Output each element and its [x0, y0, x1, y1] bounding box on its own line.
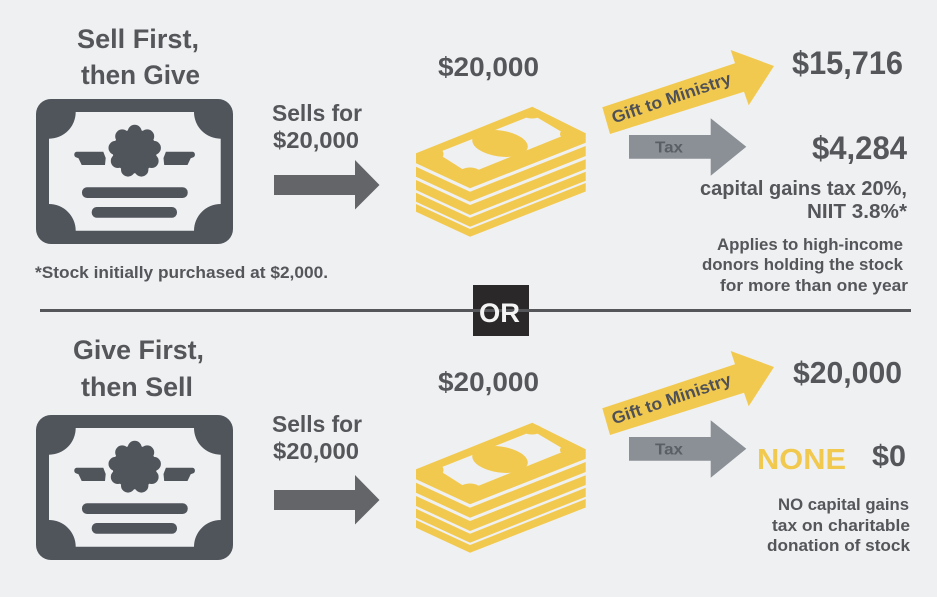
label: sells for	[272, 411, 362, 464]
text: applies to: donors holding the stock	[702, 256, 904, 274]
text: applies to: for more than one year	[720, 277, 909, 295]
amount: sale proceeds: $20,000	[438, 367, 539, 397]
label: sells for	[272, 100, 362, 153]
amount: tax: $4,284	[812, 130, 907, 166]
text: tax rates	[700, 178, 907, 223]
label: none: NONE	[757, 444, 846, 476]
icon: money stack	[416, 423, 586, 553]
heading: sell first	[77, 24, 200, 90]
heading: sell first: Sell First,	[77, 24, 199, 54]
arrow: gift to ministry: Gift to Ministry	[609, 370, 734, 428]
panel: give first, then sell	[36, 335, 911, 560]
heading: give first: Give First,	[73, 335, 204, 365]
divider line	[40, 309, 911, 312]
arrow: sale	[274, 475, 380, 524]
text: applies to	[702, 236, 909, 295]
text: tax rates: NIIT 3.8%*	[807, 201, 907, 223]
arrow: tax	[629, 118, 746, 176]
badge: or: OR	[479, 298, 520, 328]
amount: gift: $20,000	[793, 355, 902, 390]
label: sells for: Sells for	[272, 411, 362, 437]
amount: sale proceeds: $20,000	[438, 52, 539, 82]
icon: money stack	[416, 107, 586, 237]
text: no capital gains	[767, 496, 911, 555]
arrow: sale	[274, 160, 380, 210]
arrow: tax: Tax	[655, 442, 683, 458]
arrow: gift to ministry: Gift to Ministry	[609, 69, 734, 127]
label: sells for: $20,000	[273, 127, 359, 153]
text: tax rates: capital gains tax 20%,	[700, 178, 907, 200]
badge: or	[473, 285, 529, 336]
arrow: tax: Tax	[655, 140, 683, 156]
label: sells for: $20,000	[273, 438, 359, 464]
arrow: tax	[629, 420, 746, 478]
panel: sell first, then give	[35, 24, 909, 295]
heading: give first	[73, 335, 204, 402]
arrow: gift to ministry	[602, 50, 774, 134]
arrow: gift to ministry	[602, 351, 774, 435]
heading: give first: then Sell	[81, 372, 193, 402]
text: no capital gains: tax on charitable	[772, 517, 910, 535]
icon: stock certificate	[36, 99, 233, 244]
text: applies to: Applies to high-income	[717, 236, 903, 254]
heading: sell first: then Give	[81, 60, 200, 90]
label: sells for: Sells for	[272, 100, 362, 126]
text: no capital gains: donation of stock	[767, 537, 911, 555]
icon: stock certificate	[36, 415, 233, 560]
amount: tax: $0	[872, 440, 906, 473]
footnote: purchase price: *Stock initially purchased at $2,000.	[35, 264, 328, 282]
text: no capital gains: NO capital gains	[778, 496, 909, 514]
amount: gift: $15,716	[792, 45, 903, 81]
